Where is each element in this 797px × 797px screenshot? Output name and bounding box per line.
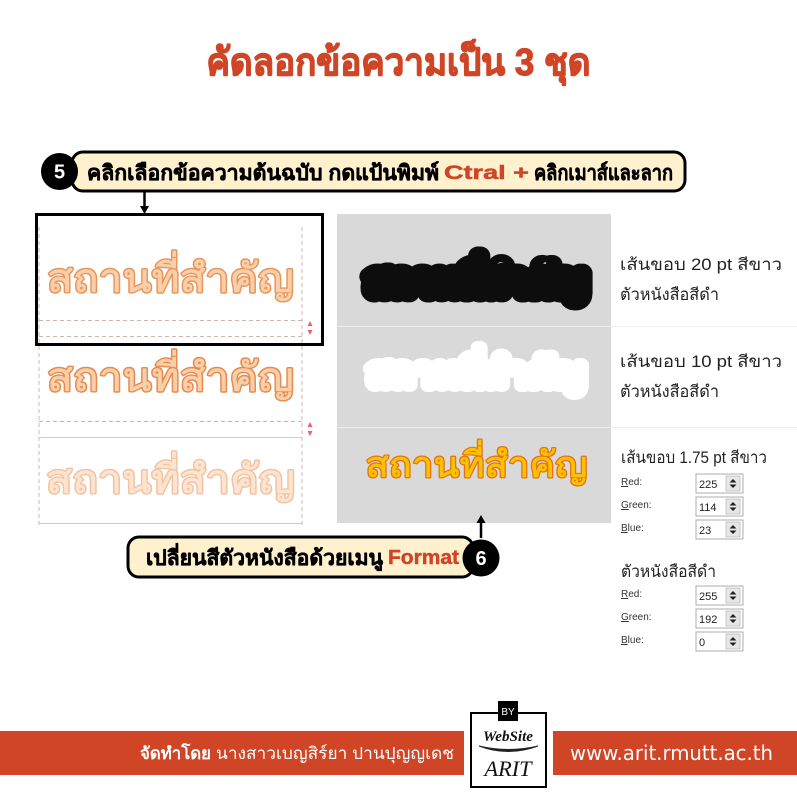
callout: step 5 (41, 152, 685, 191)
label: 1.75 pt outline with RGB: Red: (621, 477, 642, 488)
label: text colour RGB: Red: (621, 589, 642, 600)
arrow: step 6 to previews (476, 515, 486, 538)
callout: step 6 (128, 537, 500, 577)
preview: black outline: สถานที่สำคัญ (367, 256, 585, 301)
label: 20 pt outline: เส้นขอบ 20 pt สีขาว (620, 256, 782, 274)
arrow: step 5 to original text (140, 192, 149, 214)
label: 1.75 pt outline with RGB: Green: (621, 500, 652, 511)
label: 20 pt outline (620, 256, 782, 304)
label: text colour RGB: Green: (621, 612, 652, 623)
label: 10 pt outline: ตัวหนังสือสีดำ (620, 383, 719, 401)
callout: step 6: Format (388, 547, 459, 569)
label: 1.75 pt outline with RGB: เส้นขอบ 1.75 pt สีขาว (621, 449, 767, 467)
logo: by Website ARIT: WebSite (483, 729, 533, 745)
label: text colour RGB: 255 (699, 591, 717, 603)
callout: step 5: คลิกเมาส์และลาก (534, 161, 673, 185)
callout: step 5: 5 (54, 162, 65, 184)
text copy 2: สถานที่สำคัญ (47, 350, 294, 400)
preview: white outline: สถานที่สำคัญ (368, 348, 584, 393)
label: 1.75 pt outline with RGB: 23 (699, 525, 711, 537)
panel: three copies of text (39, 227, 312, 528)
label: 1.75 pt outline with RGB: Blue: (621, 523, 644, 534)
footer bar: credit: จัดทำโดย (140, 743, 211, 763)
callout: step 5: คลิกเลือกข้อความต้นฉบับ กดแป้นพิมพ์ (87, 161, 439, 185)
label: 1.75 pt outline with RGB (621, 449, 767, 539)
preview: orange text: สถานที่สำคัญ (366, 440, 588, 485)
callout: step 6: เปลี่ยนสีตัวหนังสือด้วยเมนู (146, 542, 384, 572)
footer bar: website (553, 731, 797, 775)
panel: grey previews (337, 214, 797, 523)
footer bar: website: www.arit.rmutt.ac.th (570, 741, 773, 765)
label: 10 pt outline: เส้นขอบ 10 pt สีขาว (620, 353, 782, 371)
logo: by Website ARIT (471, 701, 546, 787)
text copy 3: สถานที่สำคัญ (46, 452, 295, 502)
label: text colour RGB: ตัวหนังสือสีดำ (621, 563, 716, 581)
label: 1.75 pt outline with RGB: 225 (699, 479, 717, 491)
label: text colour RGB: 0 (699, 637, 705, 649)
label: text colour RGB: 192 (699, 614, 717, 626)
text copy 3: สถานที่สำคัญ (46, 452, 295, 502)
footer bar: credit: นางสาวเบญสิร์ยา ปานปุญญเดช (216, 744, 454, 764)
text copy 1: สถานที่สำคัญ (47, 251, 294, 301)
guide lines (39, 227, 302, 528)
label: 10 pt outline (620, 353, 782, 401)
text copy 2: สถานที่สำคัญ (47, 350, 294, 400)
callout: step 5: Ctral + (444, 163, 529, 184)
footer bar: credit (0, 731, 464, 775)
logo: by Website ARIT: ARIT (482, 756, 533, 781)
spacing markers (308, 321, 312, 436)
selection frame (36, 214, 322, 344)
callout: step 6: 6 (475, 548, 487, 570)
title: คัดลอกข้อความเป็น 3 ชุด (206, 39, 590, 86)
logo: by Website ARIT: BY (501, 707, 515, 718)
label: text colour RGB (621, 563, 743, 651)
text copy 1: สถานที่สำคัญ (47, 251, 294, 301)
label: 20 pt outline: ตัวหนังสือสีดำ (620, 286, 719, 304)
preview: orange text: สถานที่สำคัญ (366, 440, 588, 485)
label: 1.75 pt outline with RGB: 114 (699, 502, 717, 514)
label: text colour RGB: Blue: (621, 635, 644, 646)
